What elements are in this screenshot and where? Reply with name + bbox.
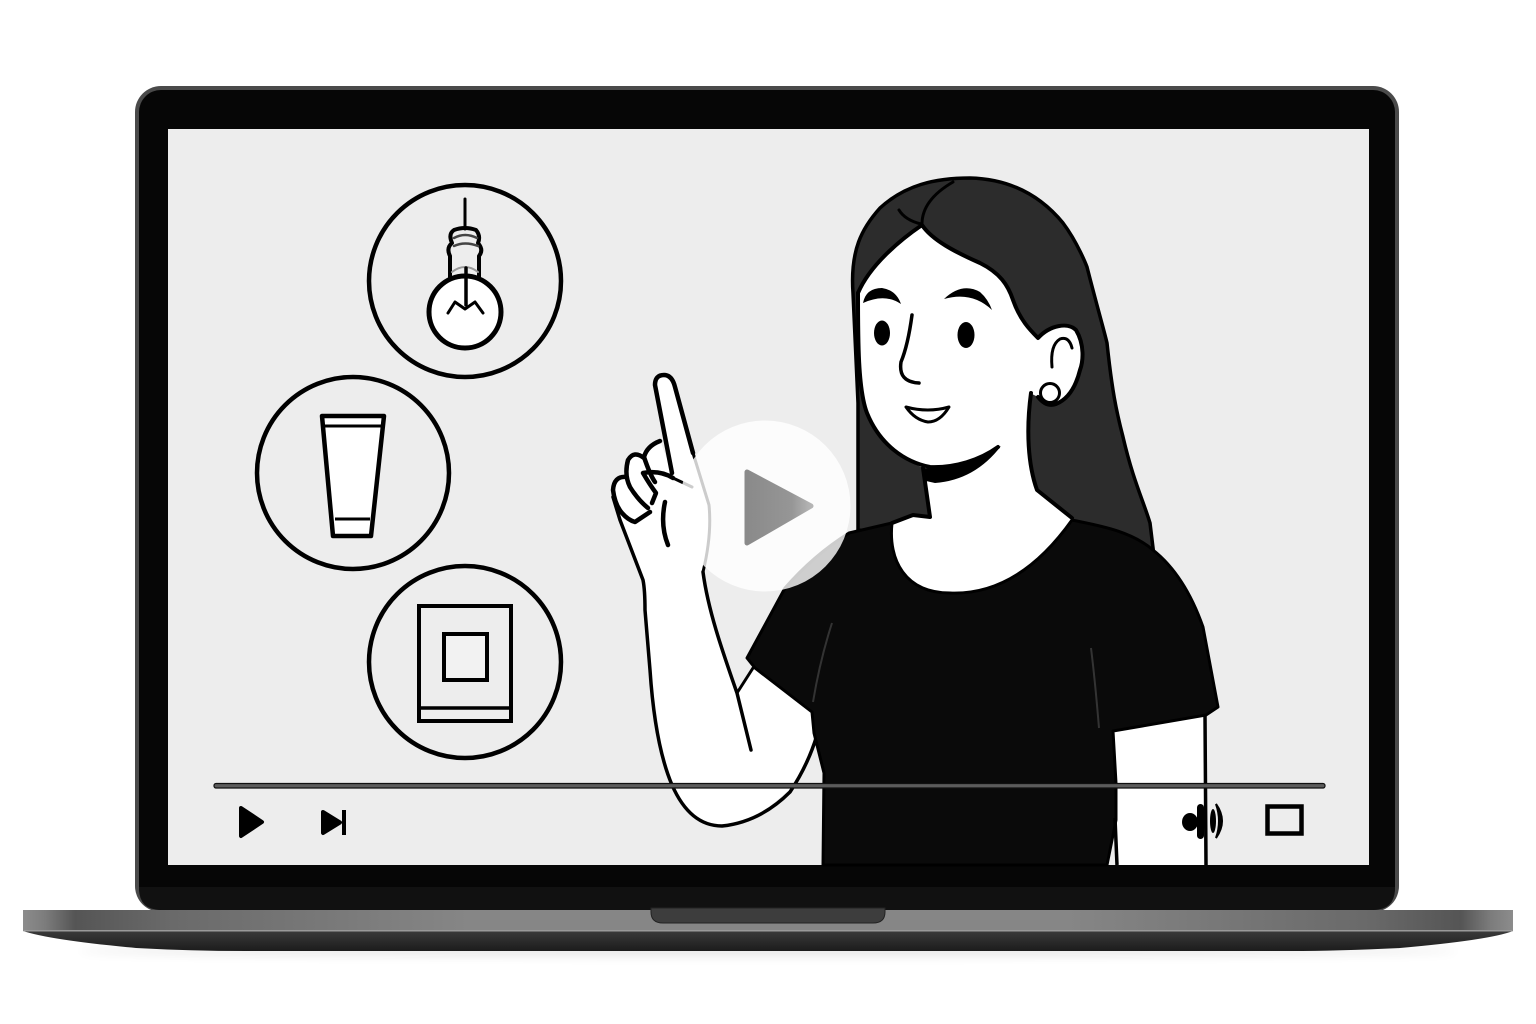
presenter: black t-shirt [747, 520, 1218, 865]
mouth [906, 407, 949, 422]
play button overlay [680, 420, 850, 592]
presenter: long hair [853, 178, 1154, 556]
screen [168, 129, 1369, 865]
icon circle: packet [369, 566, 561, 758]
laptop lid [135, 86, 1399, 912]
control: play [241, 808, 262, 836]
control: fullscreen [1268, 806, 1302, 834]
laptop base [23, 910, 1513, 951]
ear detail and earring [1040, 338, 1072, 402]
eyes [874, 320, 974, 348]
laptop notch [651, 908, 885, 923]
video progress bar [214, 784, 1325, 788]
control: volume [1182, 804, 1222, 839]
icon circle: cream tube [257, 377, 449, 569]
icon circle: light bulb [369, 185, 561, 377]
base shadow [78, 946, 1458, 956]
presenter: raised arm and pointing hand [613, 375, 817, 826]
nose [901, 315, 919, 383]
eyebrows [863, 288, 992, 310]
control: next [323, 810, 346, 835]
presenter: face, ear and neck [858, 182, 1083, 600]
chin shadow [923, 446, 1001, 483]
